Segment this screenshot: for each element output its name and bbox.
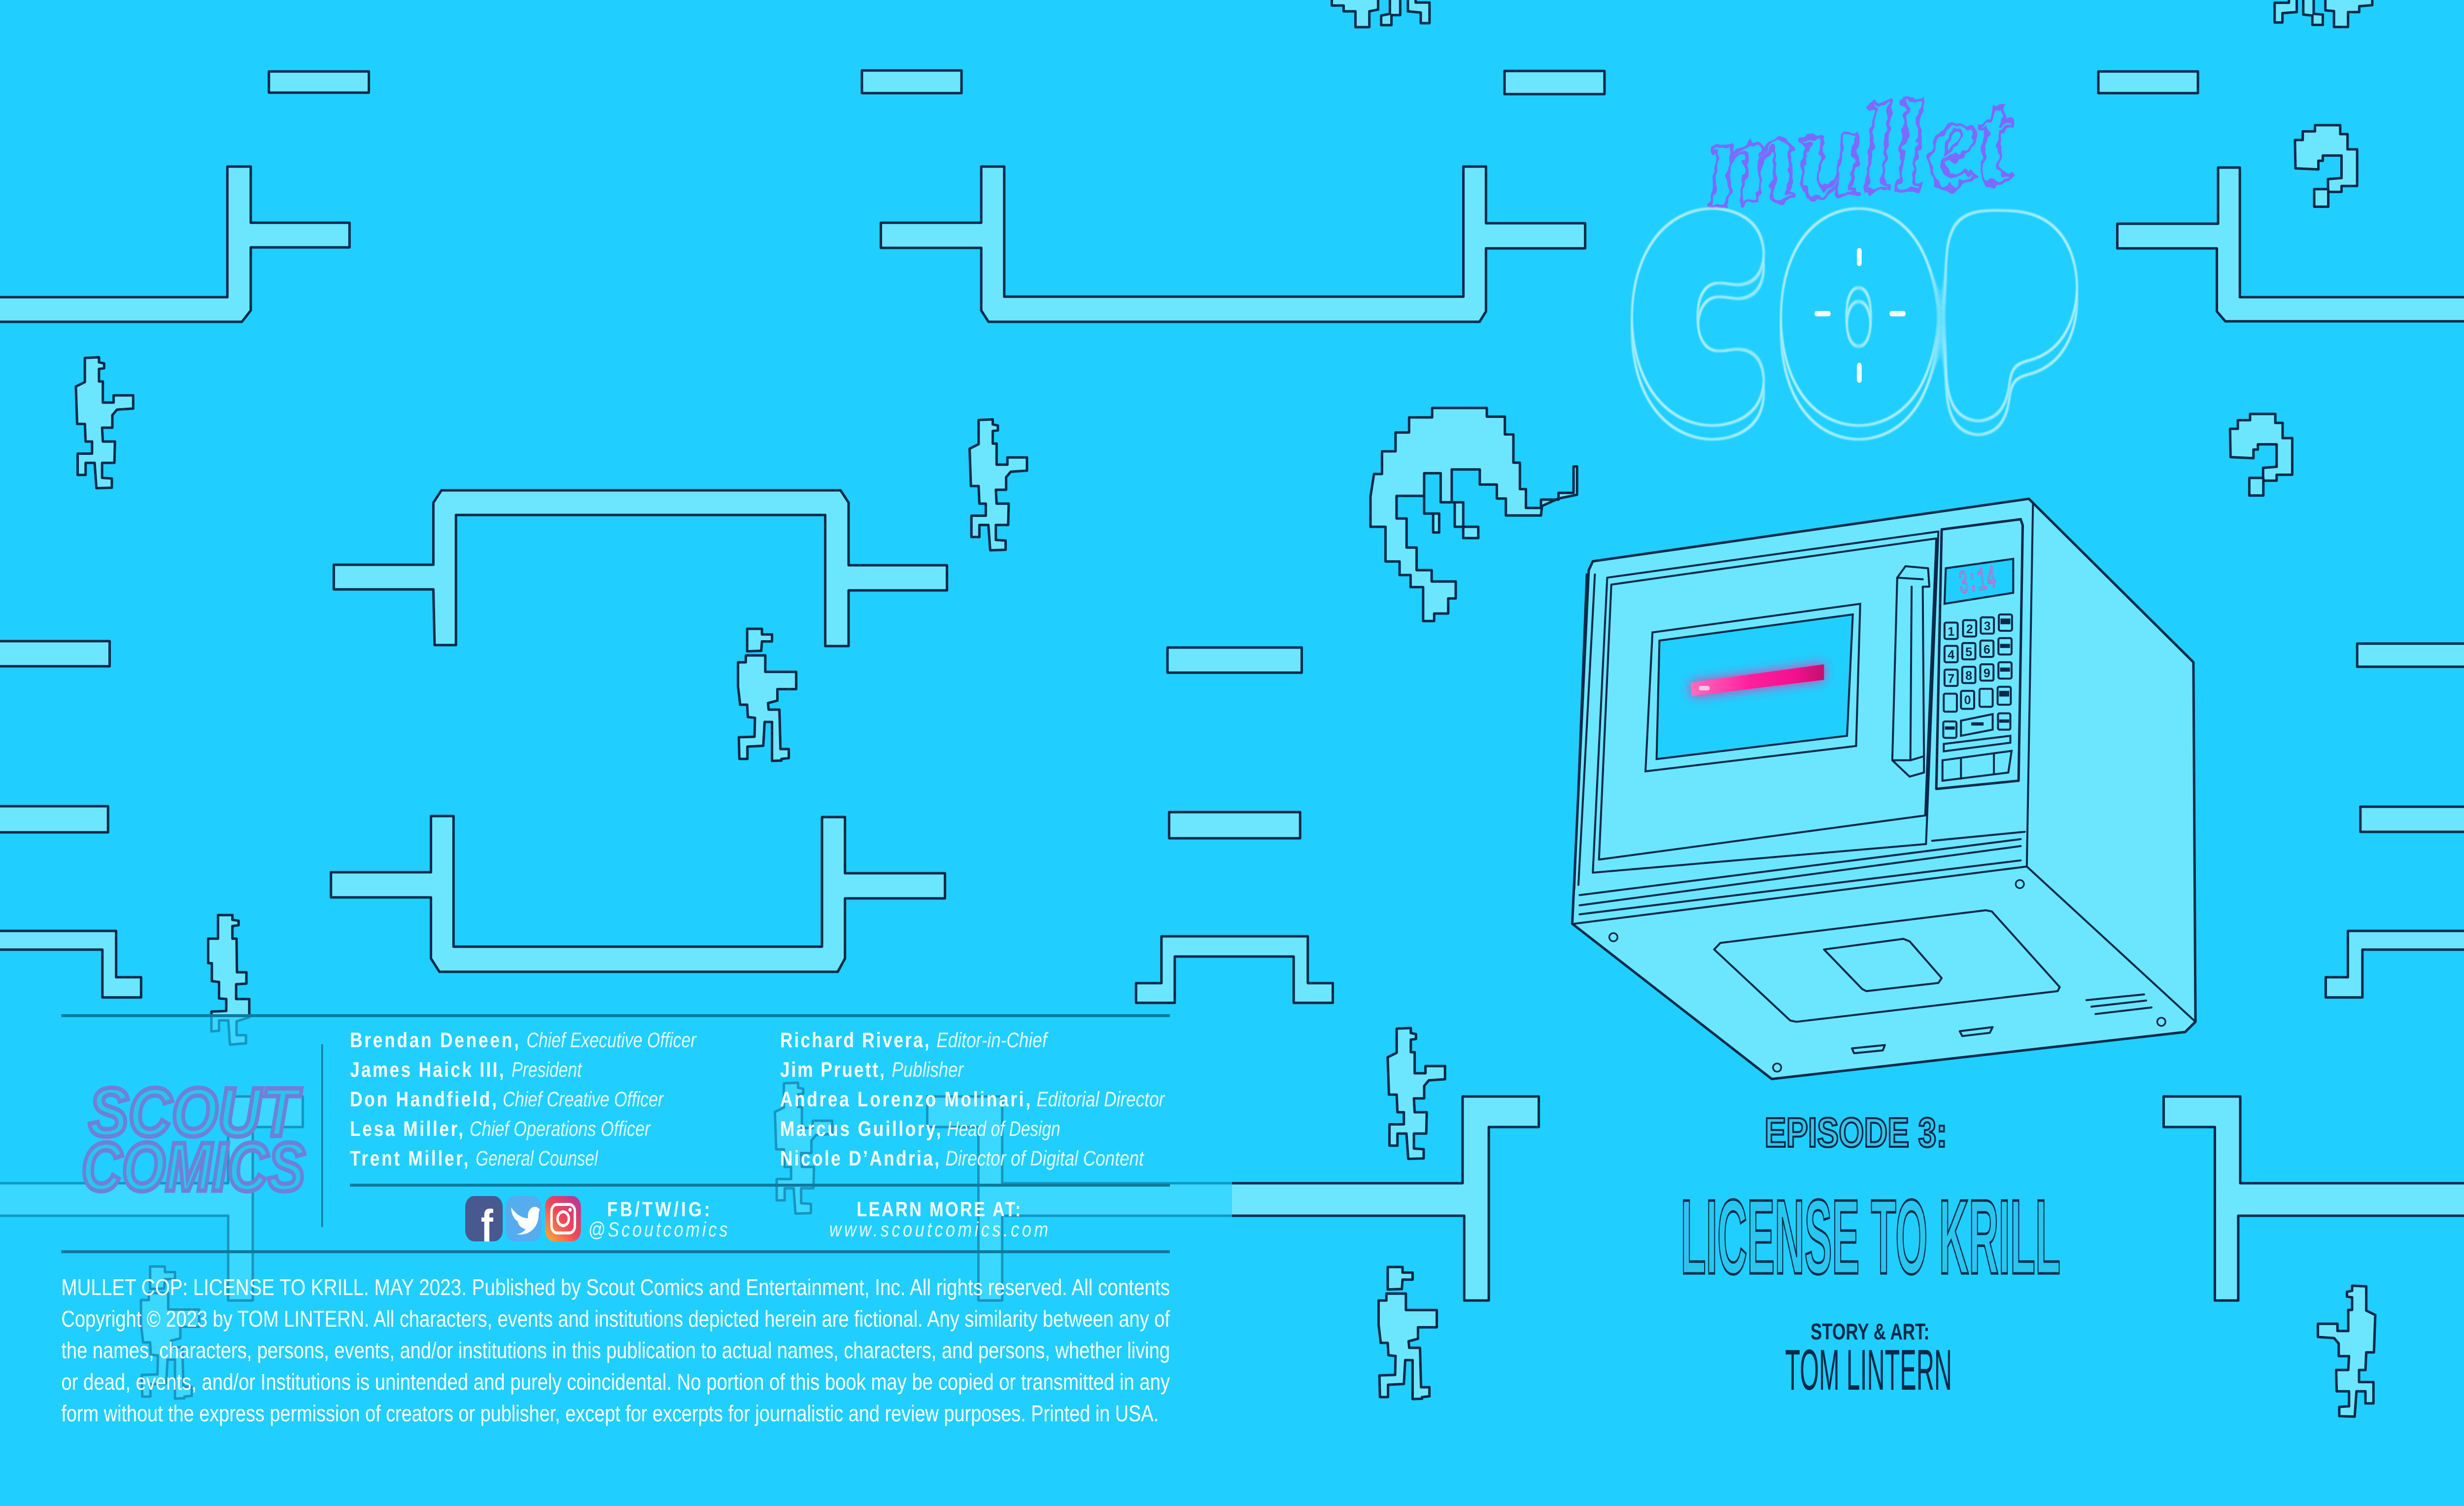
logo: Scout Comics [81, 1074, 305, 1206]
control panel [1936, 519, 2022, 789]
maze wall: left bar 1 [0, 641, 110, 666]
maze wall: left L [0, 931, 141, 997]
keypad: 7 [1948, 672, 1954, 685]
icon: facebook: f [481, 1200, 494, 1251]
keypad: 6 [1984, 643, 1990, 656]
keypad: 3 [1984, 619, 1991, 633]
credits top rule [61, 1014, 1170, 1017]
website: www.scoutcomics.com [829, 1218, 1048, 1241]
pixel figure: faint behind credits [775, 1083, 832, 1214]
pixel figure: cover left upper [1388, 1028, 1445, 1159]
legal text: or dead, events, and/or Institutions is unintended and purely coincidental. No portion of this book may be copied or transmitted in any [61, 1369, 1170, 1395]
maze wall: centre bar 2 [1169, 812, 1300, 838]
staff list column 1: Lesa Miller, [350, 1117, 463, 1141]
legal text: MULLET COP: LICENSE TO KRILL. MAY 2023. Published by Scout Comics and Entertainment, Inc. All rights reserved. All contents [61, 1274, 1170, 1300]
legal text: form without the express permission of creators or publisher, except for excerpts for journalistic and review purposes. Printed in USA. [61, 1401, 1159, 1426]
microwave edges [1574, 503, 2195, 1022]
clock display [1945, 559, 2013, 604]
staff list column 2: Editorial Director [1036, 1088, 1165, 1111]
logo: mullet: mullet [1703, 67, 2016, 234]
maze wall: lower centre box [331, 816, 945, 972]
microwave handle [1892, 566, 1929, 777]
maze wall: lower left T [0, 1096, 303, 1301]
pixel figure: by the credits rule [208, 915, 249, 1045]
maze wall: top bar 1 [269, 71, 369, 93]
staff list column 2 [780, 1028, 1165, 1170]
staff list column 1: President [512, 1058, 582, 1082]
staff list column 2: Editor-in-Chief [936, 1028, 1049, 1052]
episode label: EPISODE 3: [1765, 1110, 1947, 1156]
legal text: the names, characters, persons, events, and/or institutions in this publication to actual names, characters, and persons, whether living [61, 1337, 1170, 1363]
microwave door [1593, 532, 2025, 873]
maze wall: upper centre box [334, 490, 947, 646]
staff list column 2: Marcus Guillory, [780, 1117, 941, 1141]
microwave illustration [1572, 499, 2195, 1079]
legal text [61, 1274, 1170, 1426]
staff list column 2: Jim Pruett, [780, 1058, 885, 1082]
credits logo divider [321, 1044, 323, 1227]
maze wall: right bar 2 [2361, 807, 2464, 832]
staff list column 2: Publisher [892, 1058, 964, 1082]
microwave feet [1609, 880, 2165, 1072]
credits lower rule [61, 1250, 1170, 1253]
pixel figure: faint behind legal text [141, 1266, 199, 1399]
maze wall: top bar 3 [1505, 71, 1605, 94]
krill highlight [1699, 686, 1710, 690]
pixel figure: centre running cop [738, 629, 796, 761]
logo: Scout Comics: COMICS [81, 1129, 305, 1206]
logo: COP: COP [1640, 184, 2068, 459]
credits panel overlay [0, 1015, 1232, 1506]
pixel figure: upper middle character [970, 419, 1027, 550]
staff list column 2: Head of Design [947, 1117, 1061, 1141]
keypad: 8 [1965, 669, 1972, 683]
clock time: 3:14 [1957, 561, 1998, 604]
staff list column 1: Don Handfield, [350, 1088, 497, 1111]
author name: TOM LINTERN [1785, 1337, 1952, 1402]
icon: pixel question mark lower [2230, 414, 2292, 495]
logo: COP crosshair marks [1814, 248, 1906, 383]
pixel figure: cover left lower [1379, 1267, 1437, 1399]
staff list column 1: Trent Miller, [350, 1147, 469, 1170]
social handle: @Scoutcomics [588, 1218, 728, 1241]
icon: pixel shrimp [1370, 408, 1577, 621]
pixel figure: cropped at top right [2275, 0, 2372, 27]
keypad: 4 [1948, 648, 1954, 662]
icon: twitter [506, 1196, 542, 1241]
staff list column 1: Chief Creative Officer [503, 1088, 664, 1111]
keypad: 9 [1984, 667, 1990, 680]
microwave base [1714, 910, 2152, 1053]
maze wall: top bar 2 [862, 70, 961, 93]
maze wall: centre step [1136, 936, 1333, 1003]
keypad: 0 [1964, 693, 1971, 707]
story and art label: STORY & ART: [1811, 1319, 1929, 1344]
staff list column 1: General Counsel [476, 1147, 598, 1170]
maze wall: top right T [2117, 168, 2464, 321]
keypad [1943, 615, 2012, 781]
social handle label: FB/TW/IG: [607, 1198, 710, 1221]
microwave window frame [1645, 604, 1860, 771]
legal text: Copyright © 2023 by TOM LINTERN. All characters, events and institutions depicted herein are fictional. Any similarity between any of [61, 1306, 1170, 1332]
pixel figure: cropped at top centre [1332, 0, 1430, 27]
website label: LEARN MORE AT: [856, 1198, 1021, 1221]
text: LICENSE TO KRILL [1681, 1177, 2060, 1296]
keypad: 5 [1965, 645, 1972, 659]
maze wall: centre bar 1 [1167, 648, 1302, 673]
pixel figure: top left character [76, 357, 133, 488]
maze wall: left bar 2 [0, 806, 108, 832]
staff list column 2: Richard Rivera, [780, 1028, 929, 1052]
keypad: 2 [1966, 622, 1973, 636]
staff list column 2: Andrea Lorenzo Molinari, [780, 1088, 1030, 1111]
pixel figure: cover right lower [2318, 1286, 2375, 1417]
krill stick [1691, 664, 1824, 696]
maze wall: lower right T [2164, 1096, 2464, 1301]
staff list column 1: James Haick III, [350, 1058, 504, 1082]
icon: facebook [465, 1196, 503, 1251]
logo: Scout Comics: SCOUT [89, 1074, 302, 1151]
staff list column 1: Brendan Deneen, [350, 1028, 519, 1052]
maze wall: top left T [0, 167, 349, 322]
maze wall: right bar 1 [2357, 644, 2464, 667]
maze wall: lower centre double T [927, 1096, 1539, 1301]
microwave window [1657, 615, 1853, 759]
staff list column 2: Director of Digital Content [945, 1147, 1145, 1170]
staff list column 1: Chief Operations Officer [470, 1117, 651, 1141]
maze wall: top bar 4 [2098, 71, 2198, 93]
keypad: 1 [1948, 625, 1954, 639]
maze wall: top middle U [881, 167, 1585, 322]
staff list column 1: Chief Executive Officer [526, 1028, 697, 1052]
icon: pixel question mark upper [2295, 125, 2357, 206]
icon: instagram [545, 1196, 581, 1241]
maze wall: right L [2326, 931, 2464, 997]
staff list column 2: Nicole D’Andria, [780, 1147, 939, 1170]
credits middle rule [350, 1184, 1170, 1187]
krill glow [1691, 664, 1824, 696]
microwave body [1572, 499, 2195, 1079]
staff list column 1 [350, 1028, 697, 1170]
